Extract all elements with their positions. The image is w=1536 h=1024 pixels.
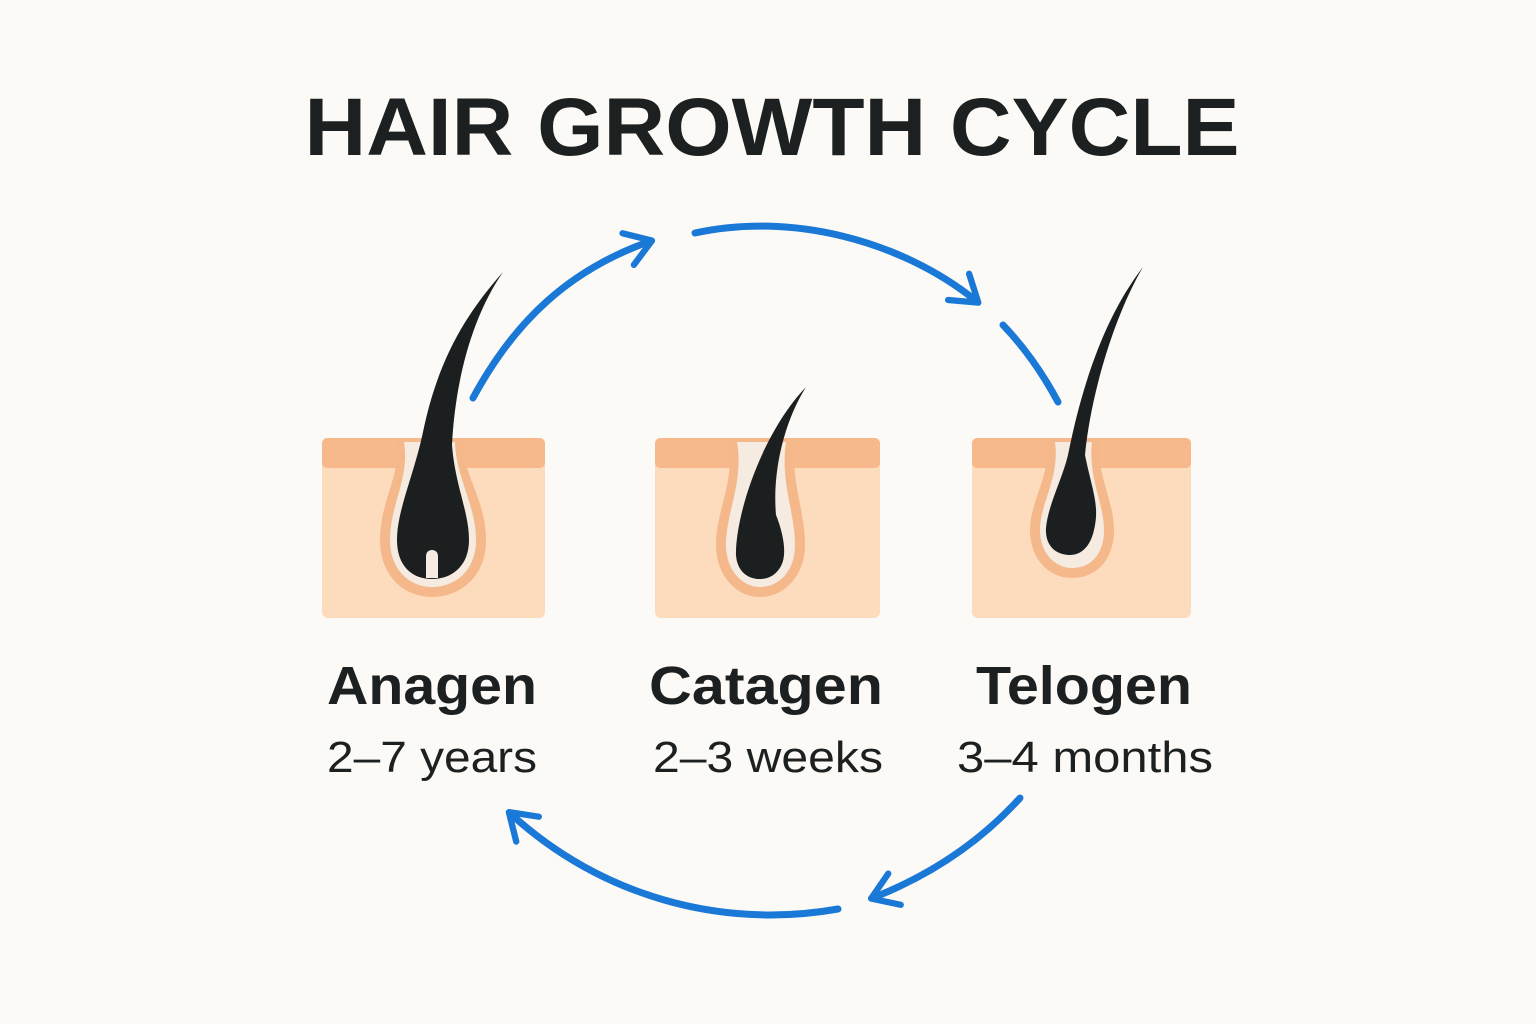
arrow: telogen to bottom	[875, 798, 1020, 897]
label: anagen: 2–7 years	[327, 733, 537, 782]
panel: catagen follicle	[655, 387, 880, 618]
label: anagen: Anagen	[327, 656, 537, 716]
arrow: catagen to telogen	[695, 226, 975, 300]
label: telogen: 3–4 months	[957, 733, 1213, 782]
panel: anagen follicle	[322, 272, 545, 618]
label: anagen	[327, 656, 537, 782]
label: catagen: Catagen	[649, 656, 883, 716]
label: telogen	[957, 656, 1213, 782]
arrow: back to anagen	[512, 815, 838, 915]
label: catagen	[649, 656, 883, 782]
arrow: telogen segment	[1003, 325, 1058, 402]
label: catagen: 2–3 weeks	[653, 733, 883, 782]
label: telogen: Telogen	[976, 656, 1192, 716]
title: HAIR GROWTH CYCLE	[304, 82, 1240, 173]
panel: telogen follicle	[972, 267, 1191, 618]
arrow: anagen to catagen	[473, 242, 648, 398]
